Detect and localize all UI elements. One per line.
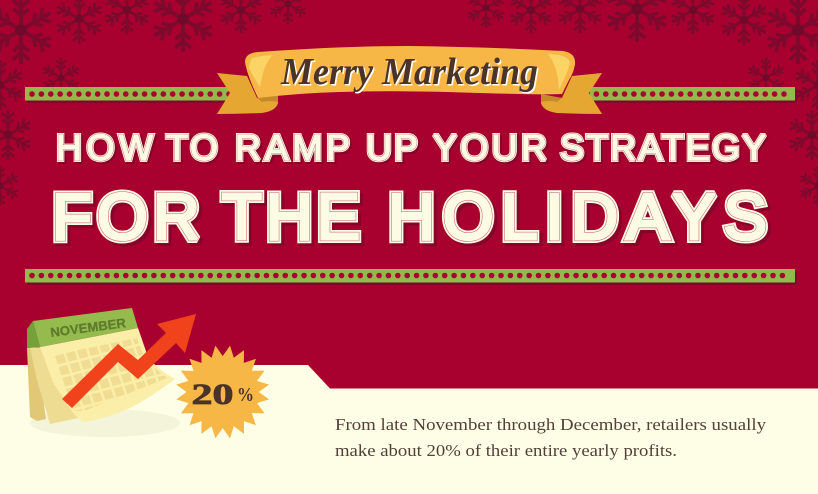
calendar month label: NOVEMBER	[49, 315, 127, 340]
ribbon banner	[217, 46, 602, 114]
icon: calendar	[27, 308, 175, 424]
badge: 20 percent	[169, 338, 276, 446]
cream lower panel	[0, 365, 818, 494]
body text: make about 20% of their entire yearly profits.	[335, 441, 677, 460]
badge percent sign: %	[237, 384, 254, 406]
title line 2	[52, 180, 770, 256]
badge value: 20	[192, 378, 234, 411]
top left dotted bar	[25, 87, 231, 103]
top right dotted bar	[590, 87, 797, 103]
calendar shadow	[30, 409, 180, 437]
ribbon text: Merry Marketing	[280, 51, 538, 93]
ribbon text: Merry Marketing	[282, 52, 540, 94]
body text: From late November through December, retailers usually	[335, 415, 767, 434]
arrow: rising trend	[62, 314, 196, 408]
snowflake pattern	[0, 0, 818, 206]
lower dotted bar	[25, 269, 797, 285]
title line 1	[56, 127, 768, 170]
